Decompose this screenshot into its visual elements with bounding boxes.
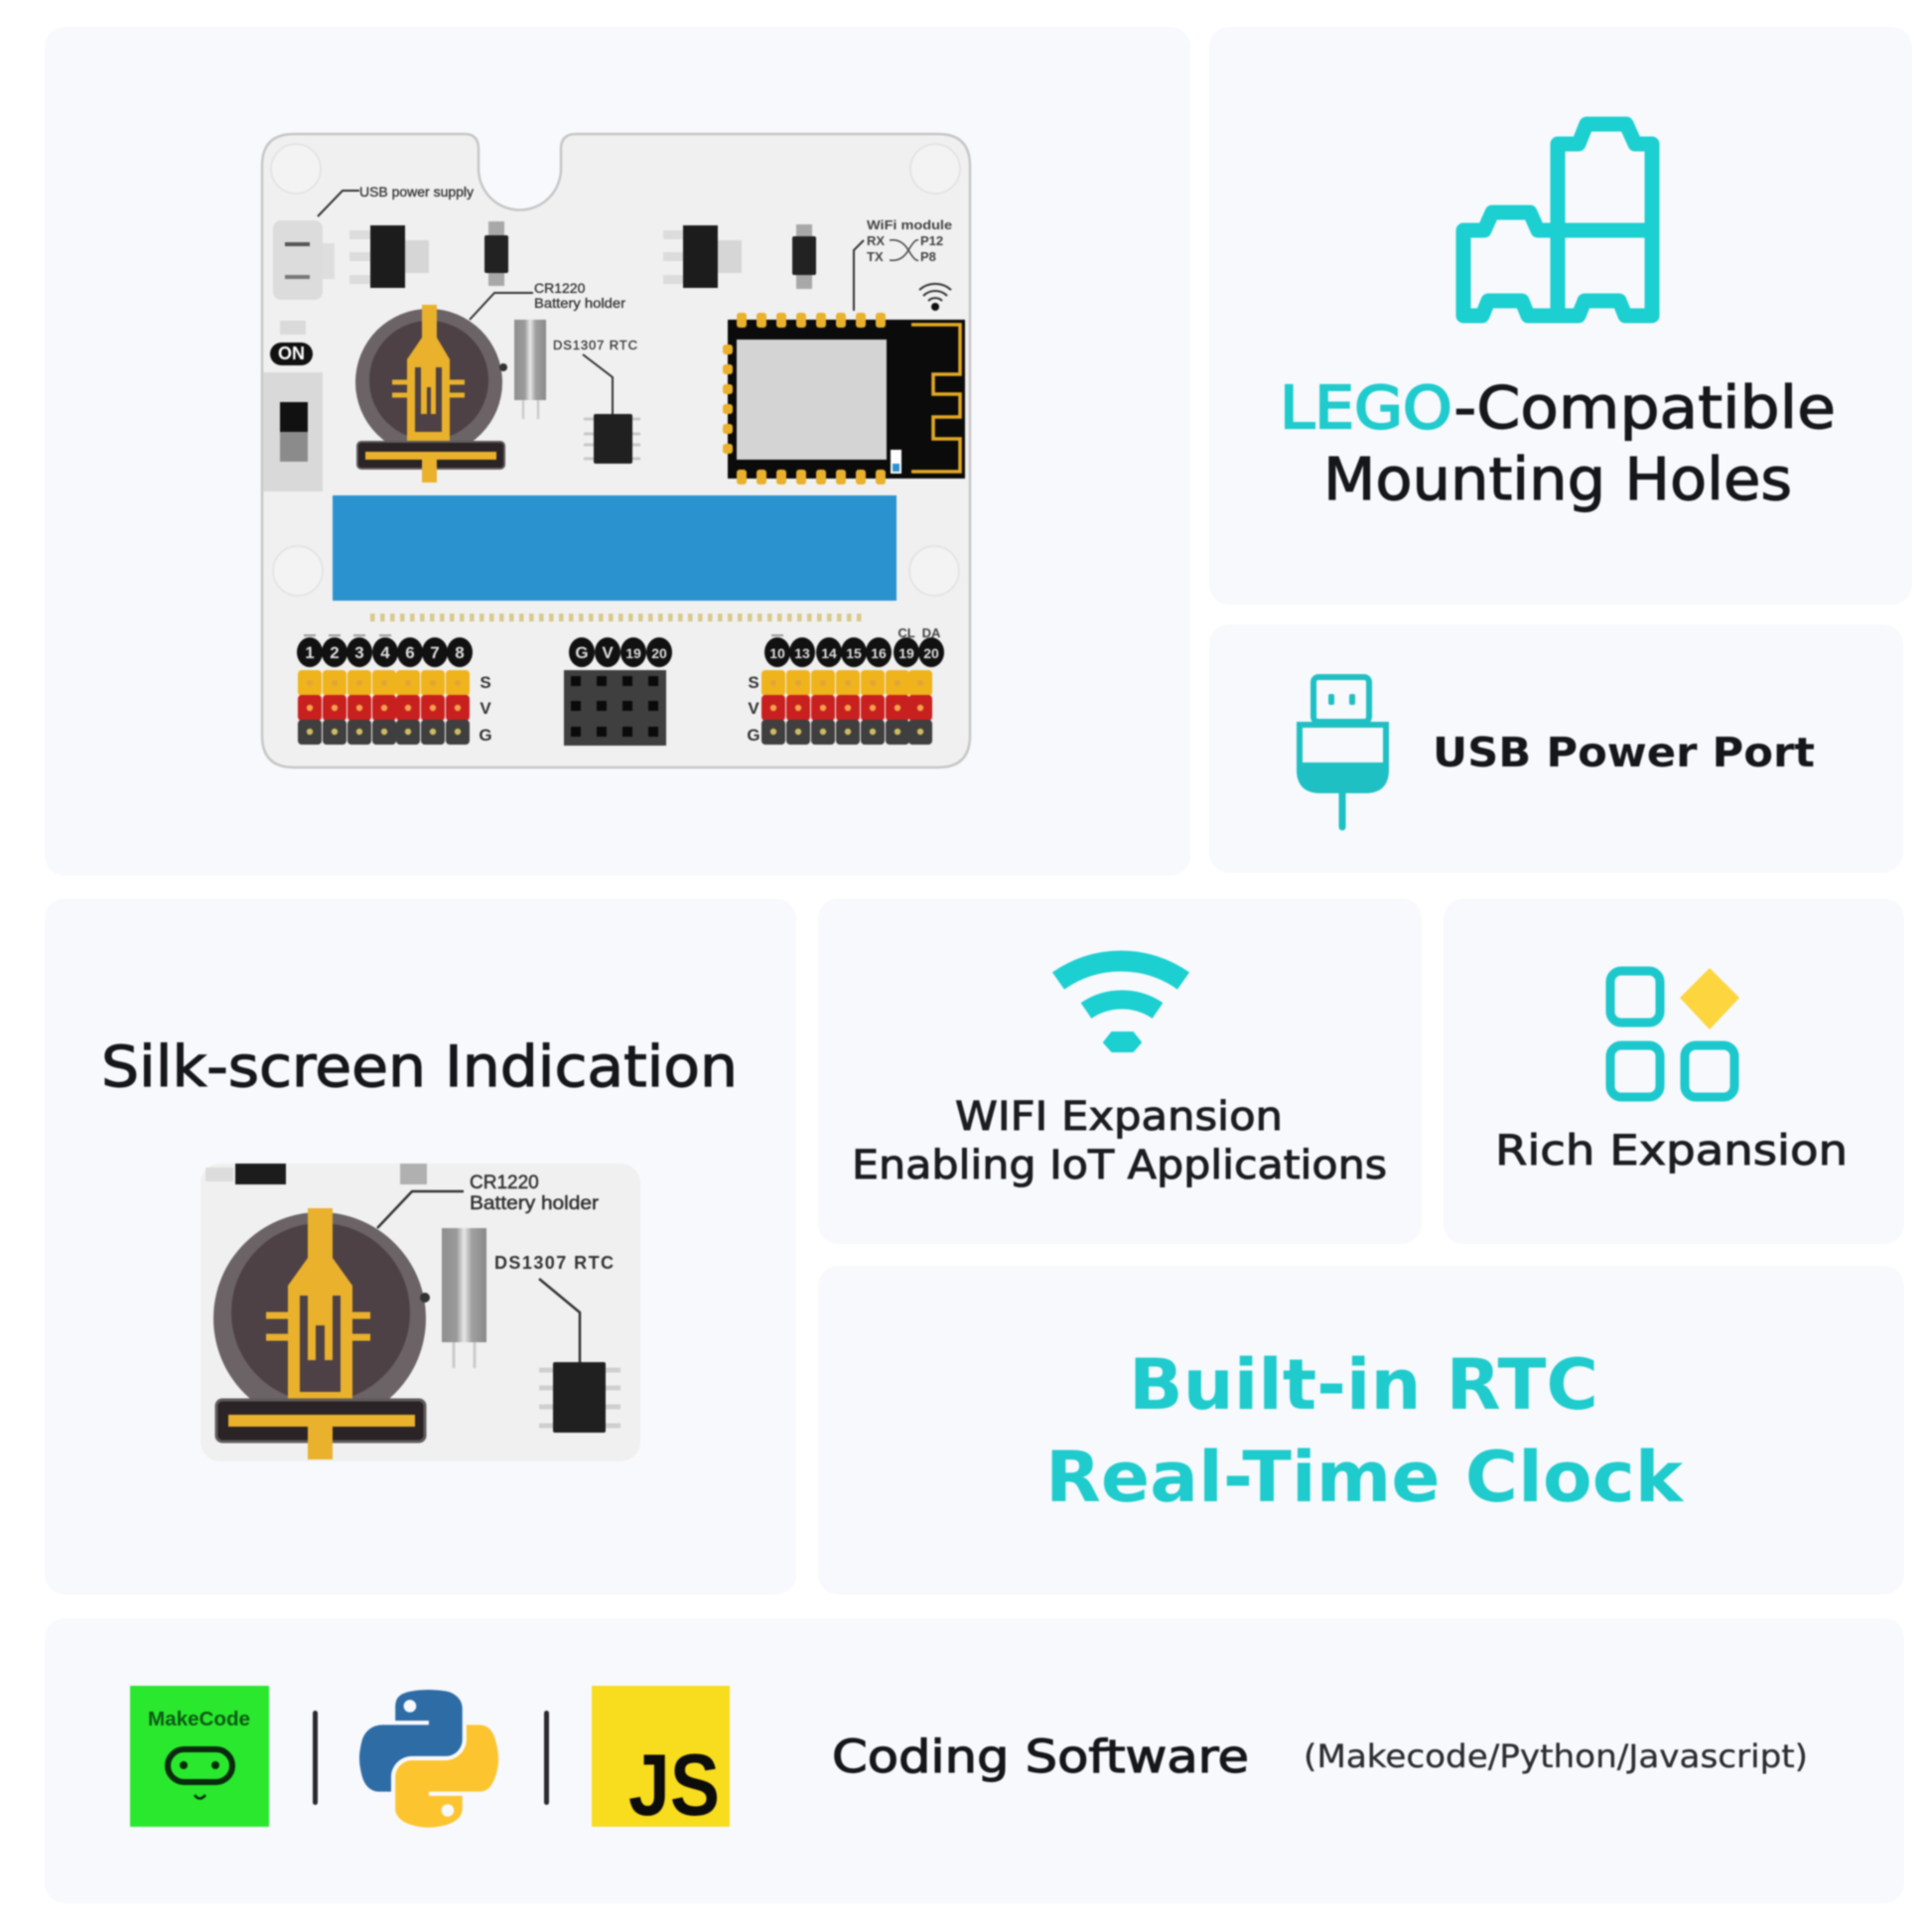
board diagram: 1 [305,643,315,662]
board diagram: CL [897,625,915,640]
board diagram: 6 [405,643,415,662]
label: supported languages: (Makecode/Python/Javascript) [1304,1737,1808,1775]
board diagram: 10 [769,645,785,661]
board diagram: 7 [430,643,440,662]
board diagram: G [575,643,589,662]
board diagram: 19 [625,645,641,661]
icon: expansion blocks [1610,968,1739,1097]
board diagram: 2 [330,643,340,662]
panel: built-in RTC [818,1266,1904,1594]
heading: real-time clock: Real-Time Clock [1045,1437,1684,1518]
heading: silk-screen indication: Silk-screen Indication [101,1035,738,1100]
detail: battery holder and RTC close-up [201,1164,640,1461]
panel: LEGO-compatible mounting holes [1209,27,1912,605]
label: USB power port: USB Power Port [1433,729,1815,776]
board diagram: 20 [651,645,667,661]
board diagram: V [748,699,759,718]
divider bar [313,1711,318,1805]
icon: USB plug [1297,677,1389,827]
board diagram: P8 [920,249,936,264]
logo: MakeCode: MakeCode [148,1709,250,1730]
board diagram: USB power supply [359,184,474,200]
board diagram: 16 [871,645,887,661]
detail: battery holder and RTC close-up: DS1307 RTC [494,1253,614,1273]
board diagram [262,134,970,767]
board diagram: G [747,726,760,745]
board diagram: 20 [923,645,939,661]
board diagram: 15 [846,645,862,661]
board diagram: Battery holder [534,295,625,311]
board diagram: 13 [794,645,810,661]
heading: built-in RTC: Built-in RTC [1129,1344,1598,1426]
detail: battery holder and RTC close-up: CR1220 [470,1173,539,1193]
board diagram: 8 [455,643,465,662]
icon: LEGO bricks [1463,124,1652,316]
detail: battery holder and RTC close-up: Battery holder [470,1193,600,1214]
heading: LEGO-compatible: LEGO-Compatible [1280,373,1836,442]
logo: MakeCode [130,1686,269,1827]
board diagram: S [748,673,759,692]
panel: USB power port [1209,624,1903,873]
board diagram: DS1307 RTC [553,338,637,352]
board diagram: 19 [898,645,914,661]
label: rich expansion: Rich Expansion [1495,1126,1848,1174]
board diagram: TX [867,249,884,264]
panel: rich expansion [1444,898,1904,1244]
label: WiFi expansion line 1: WIFI Expansion [955,1094,1283,1140]
label: coding software: Coding Software [832,1730,1249,1783]
label: WiFi expansion line 2: Enabling IoT Applications [852,1143,1387,1188]
board diagram: V [480,699,491,718]
panel: board illustration [45,27,1190,876]
panel: silk-screen indication [45,898,796,1594]
board diagram: V [602,643,614,662]
board diagram: 14 [821,645,837,661]
heading: mounting holes: Mounting Holes [1323,445,1792,513]
board diagram: WiFi module [867,217,952,232]
board diagram: DA [922,625,941,640]
board diagram: 4 [380,643,390,662]
board diagram: 3 [354,643,364,662]
board diagram: P12 [920,233,943,248]
panel: WiFi expansion [818,898,1422,1244]
logo: Python [359,1690,498,1828]
board diagram: CR1220 [534,280,586,296]
logo: JavaScript: JS [628,1735,720,1834]
icon: WiFi [1058,961,1183,1051]
board diagram: G [479,726,492,745]
divider bar [544,1711,549,1805]
board diagram: RX [867,233,885,248]
board diagram: ON [278,344,305,363]
logo: JavaScript [592,1686,730,1834]
board diagram: S [480,673,491,692]
panel: coding software [45,1618,1904,1903]
